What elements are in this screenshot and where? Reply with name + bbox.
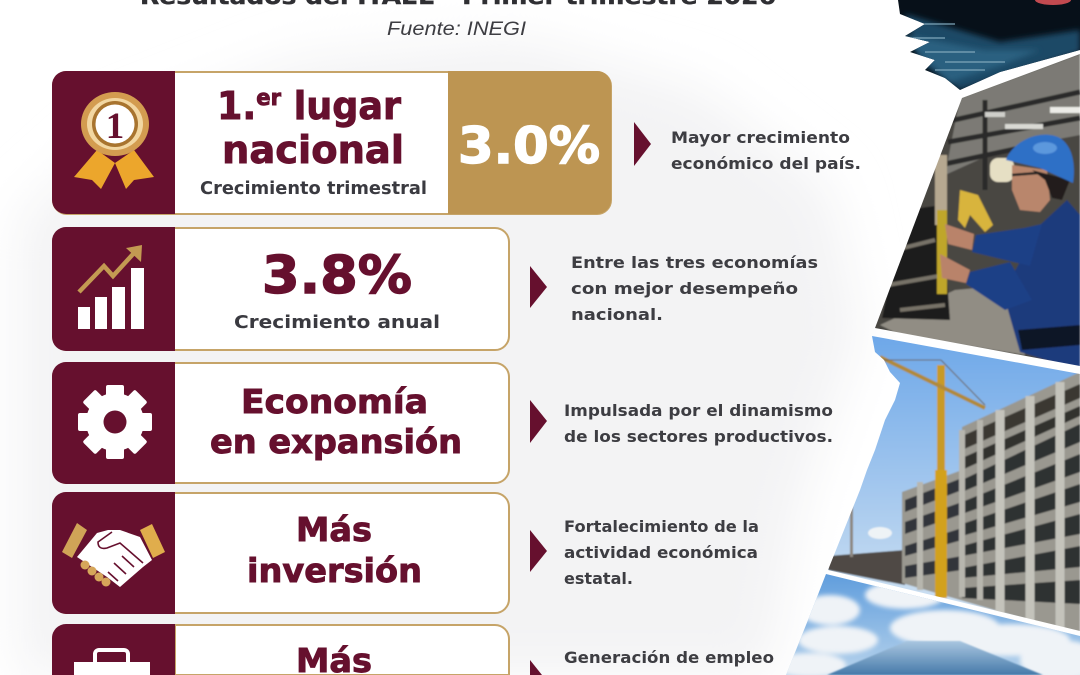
row 3 heading: Economía — [241, 382, 428, 421]
row 2 description: nacional. — [571, 305, 663, 324]
row 2 card — [53, 228, 509, 350]
row 5: more employment — [52, 624, 509, 675]
row 4 description — [564, 517, 759, 588]
crane — [935, 470, 947, 598]
photo: water — [890, 0, 1080, 95]
row 3 description: de los sectores productivos. — [564, 427, 833, 446]
row 3 card — [53, 363, 509, 483]
row 1 description — [671, 128, 861, 173]
row 3: expanding economy — [52, 362, 509, 484]
row 2 description: Entre las tres economías — [571, 253, 818, 272]
row 4 description: actividad económica — [564, 543, 758, 562]
row 3 description — [564, 401, 833, 446]
row 4 card — [53, 493, 509, 613]
row 4 heading: Más — [296, 510, 372, 549]
row 1 description: económico del país. — [671, 154, 861, 173]
icon: growth chart — [78, 245, 144, 329]
arrow 4 — [530, 530, 547, 572]
row 1 heading: er — [256, 86, 281, 111]
icon: briefcase — [74, 650, 150, 675]
row 1 value box — [448, 71, 611, 214]
arrow 3 — [530, 400, 547, 443]
row 2: annual growth — [52, 227, 509, 351]
row 1 description: Mayor crecimiento — [671, 128, 850, 147]
row 1 heading: 1. — [217, 84, 258, 128]
icon: medal — [74, 92, 154, 189]
arrow 1 — [634, 122, 651, 166]
photo: construction site — [820, 330, 1080, 640]
row 5 icon panel — [52, 624, 175, 675]
arrow 2 — [530, 266, 547, 308]
photo: factory worker — [870, 50, 1080, 370]
row 1 value: 3.0% — [458, 117, 600, 175]
row 4 icon panel — [52, 492, 175, 614]
row 4 description: Fortalecimiento de la — [564, 517, 759, 536]
row 1 heading: lugar — [281, 84, 401, 128]
row 4: more investment — [52, 492, 509, 614]
photo: volcano and clouds — [774, 570, 1080, 675]
row 3 icon panel — [52, 362, 175, 484]
source note: Fuente: INEGI — [387, 18, 527, 40]
row 2 value: 3.8% — [262, 246, 412, 306]
row 4 heading line 2: inversión — [247, 551, 422, 590]
row 1 card — [53, 72, 611, 214]
row 3 description: Impulsada por el dinamismo — [564, 401, 833, 420]
row 5 card — [175, 625, 509, 675]
row 3 heading line 2: en expansión — [210, 422, 462, 461]
row 2 description: con mejor desempeño — [571, 279, 798, 298]
row 1: first place — [52, 71, 611, 214]
icon: medal: 1 — [106, 106, 124, 147]
row 4 description: estatal. — [564, 569, 633, 588]
icon: handshake — [62, 523, 165, 587]
row 1 heading line 2: nacional — [222, 128, 404, 172]
row 1 subheading: Crecimiento trimestral — [200, 179, 427, 199]
row 2 description — [571, 253, 818, 324]
row 5 description: Generación de empleo — [564, 648, 774, 667]
main building — [902, 372, 1080, 635]
small background building — [828, 550, 905, 585]
row 2 subheading: Crecimiento anual — [234, 313, 440, 333]
row 1 icon panel — [52, 71, 175, 214]
row 2 icon panel — [52, 227, 175, 351]
icon: gear — [78, 385, 152, 459]
arrow 5 — [530, 660, 542, 675]
